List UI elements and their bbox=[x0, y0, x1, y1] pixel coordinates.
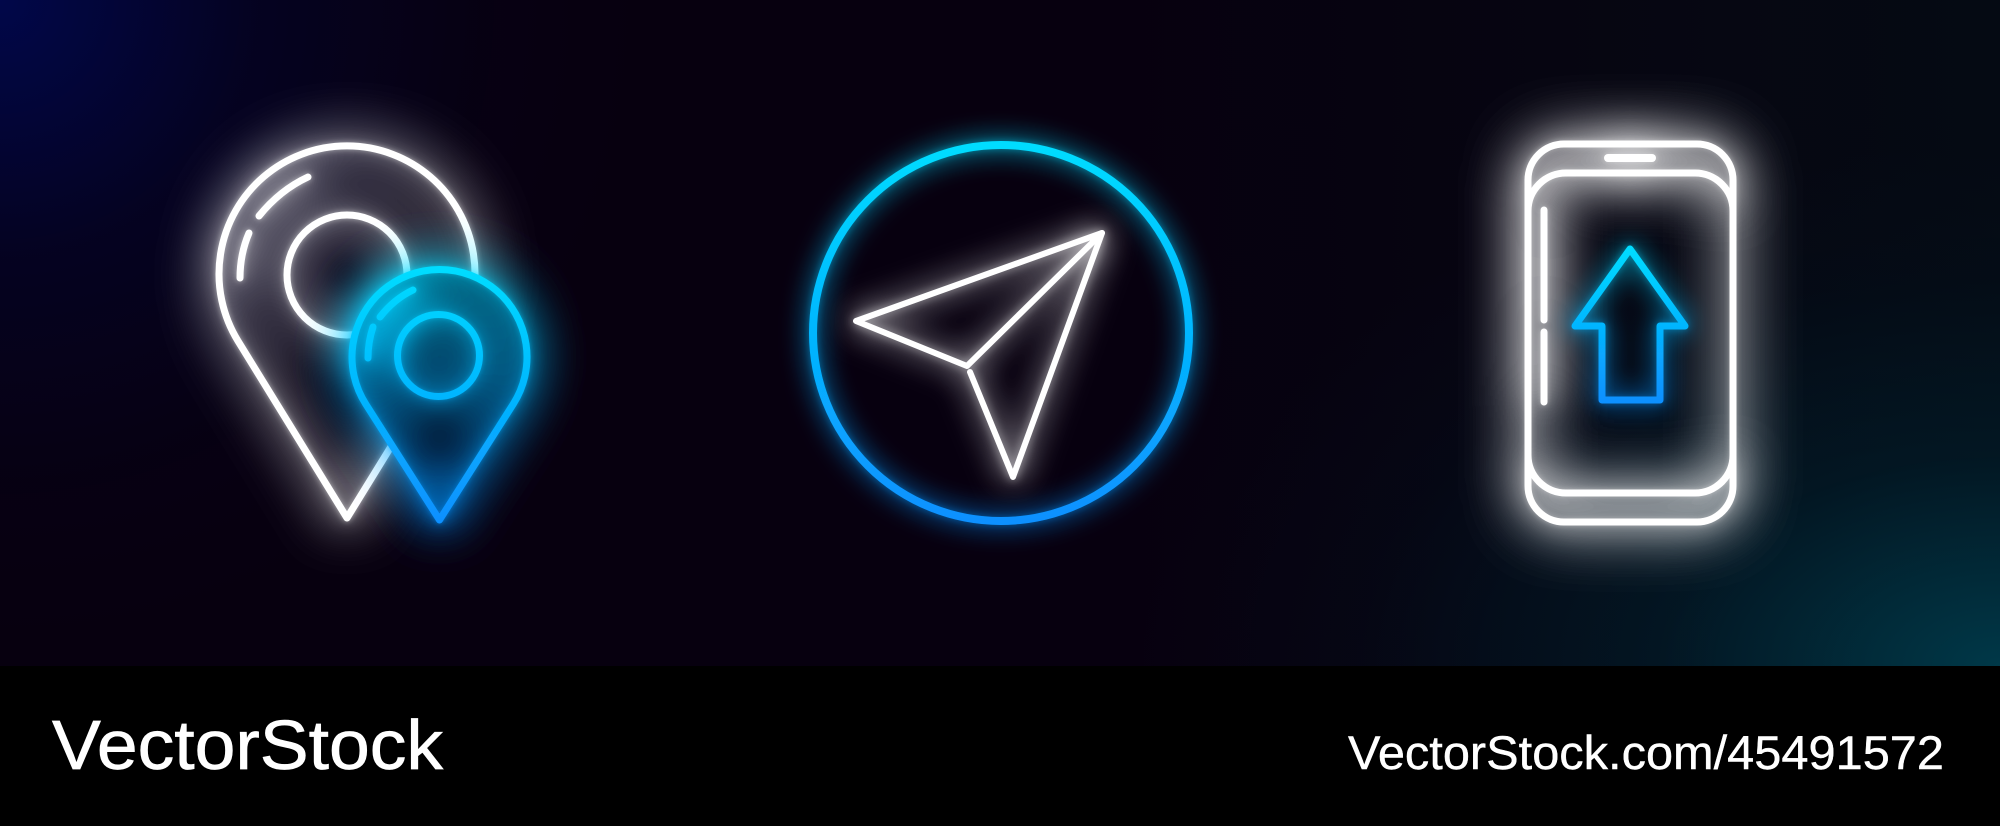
white paper plane bbox=[856, 233, 1102, 477]
icon: overlapping map pins bbox=[219, 146, 527, 520]
icon: navigation arrow in circle bbox=[813, 145, 1189, 521]
white map pin bbox=[219, 146, 475, 518]
blue circle ring bbox=[813, 145, 1189, 521]
icon: smartphone with up arrow bbox=[1528, 144, 1733, 522]
footer band bbox=[0, 666, 2000, 826]
white phone outline bbox=[1528, 144, 1733, 522]
blue up arrow bbox=[1575, 249, 1685, 400]
VectorStock logo wordmark: VectorStock bbox=[52, 706, 444, 784]
blue map pin bbox=[352, 269, 527, 520]
image URL and id: VectorStock.com/45491572 bbox=[1348, 726, 1944, 779]
